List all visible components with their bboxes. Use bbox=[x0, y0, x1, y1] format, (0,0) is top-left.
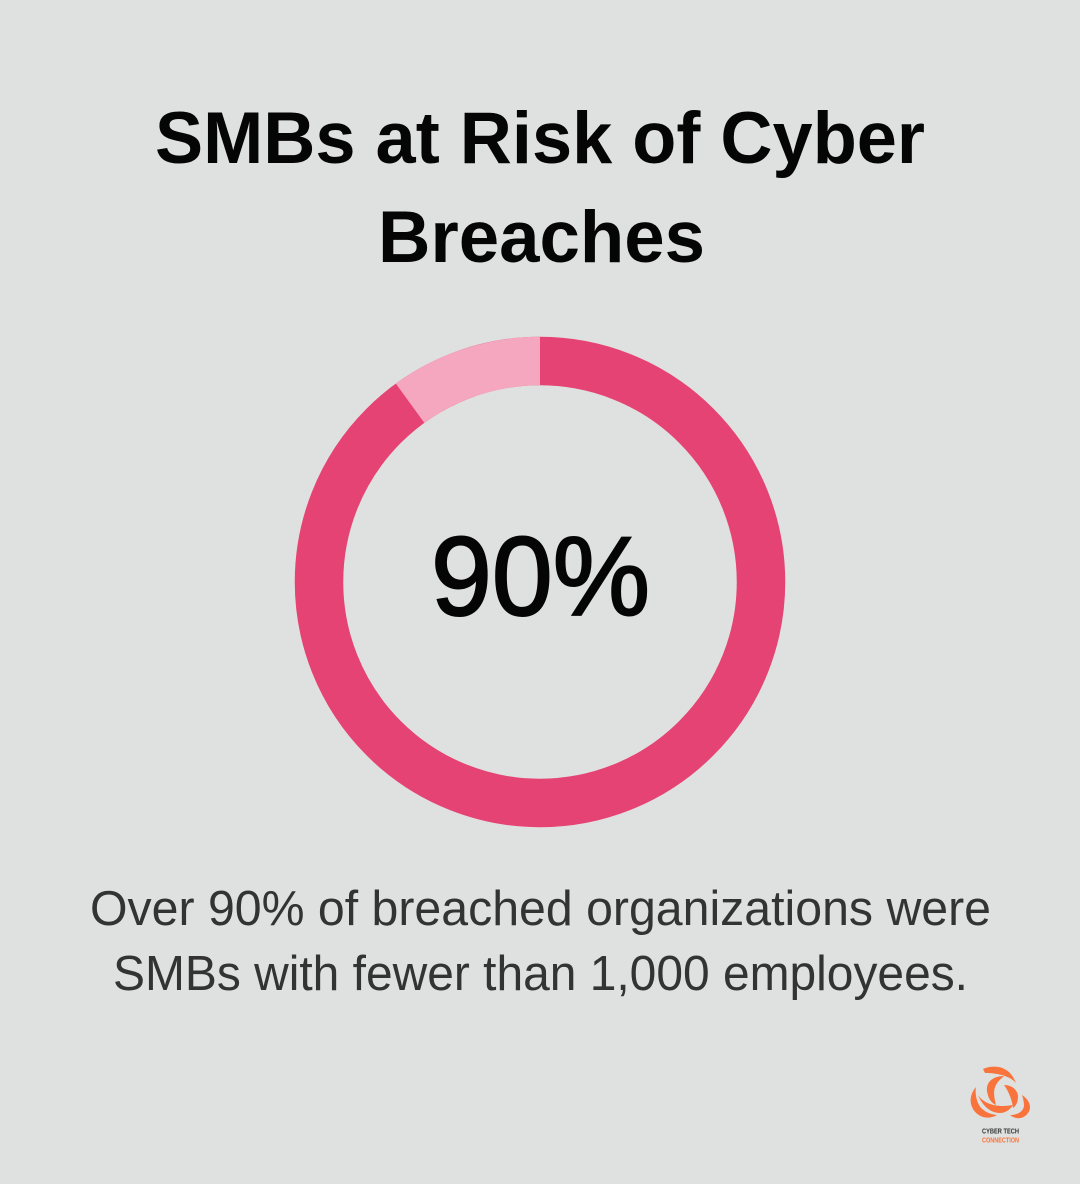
donut chart: 90% bbox=[319, 361, 761, 803]
description text bbox=[90, 882, 991, 1001]
description text: Over 90% of breached organizations were bbox=[90, 882, 991, 936]
icon: orange triskelion bbox=[971, 1067, 1030, 1118]
title bbox=[155, 98, 925, 278]
donut segment: remaining 10% bbox=[410, 361, 540, 403]
center value: 90% bbox=[431, 514, 650, 639]
donut segment: 90% share bbox=[319, 361, 761, 803]
logo text: CONNECTION: CONNECTION bbox=[982, 1138, 1019, 1144]
logo: Cyber Tech Connection bbox=[971, 1067, 1030, 1144]
description text: SMBs with fewer than 1,000 employees. bbox=[113, 947, 968, 1001]
title: Breaches bbox=[378, 197, 705, 278]
logo text: CYBER TECH: CYBER TECH bbox=[982, 1128, 1019, 1136]
title: SMBs at Risk of Cyber bbox=[155, 98, 925, 179]
